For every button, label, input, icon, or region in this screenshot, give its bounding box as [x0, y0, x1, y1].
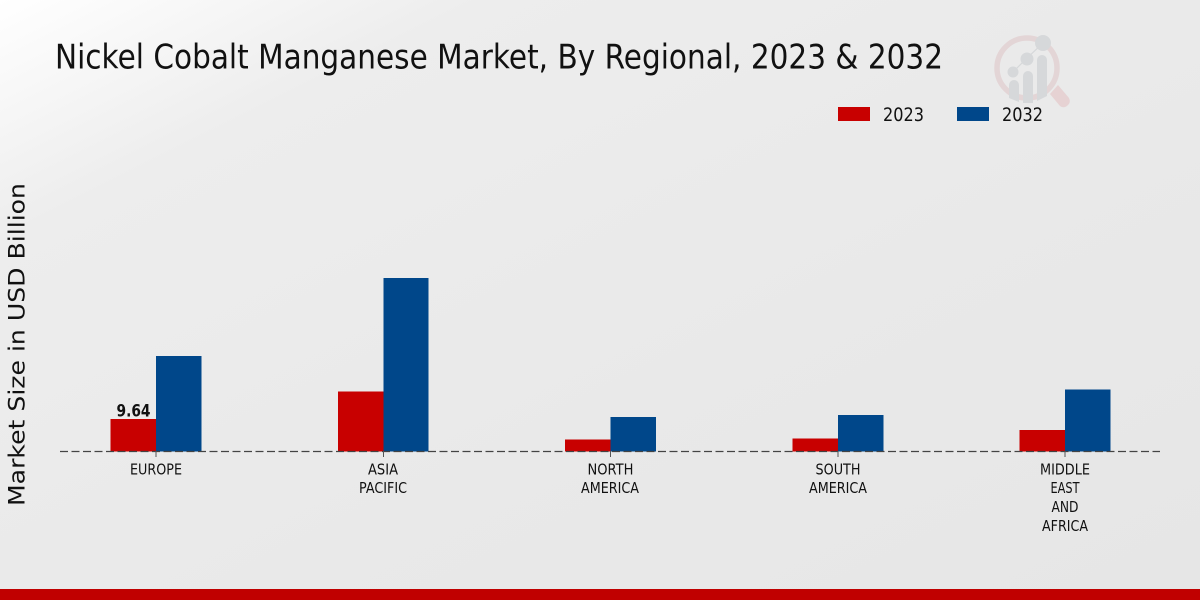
group: North America	[565, 417, 656, 452]
watermark logo icon	[997, 35, 1070, 107]
label: North America: NORTH	[588, 460, 634, 478]
group: Europe	[110, 356, 202, 452]
label: Middle East and Africa	[1040, 460, 1090, 535]
title: Nickel Cobalt Manganese Market, By Regional, 2023 & 2032	[55, 38, 943, 78]
bottom bar	[0, 589, 1200, 600]
label: Middle East and Africa: AND	[1052, 498, 1078, 516]
label: Middle East and Africa: MIDDLE	[1040, 460, 1090, 478]
x axis baseline	[60, 451, 1160, 457]
label: Middle East and Africa: EAST	[1050, 479, 1080, 497]
group: Middle East and Africa	[1020, 390, 1110, 452]
y axis label: Market Size in USD Billion	[4, 183, 30, 506]
label: South America: AMERICA	[809, 479, 868, 497]
label: Asia Pacific	[359, 460, 407, 497]
x axis labels	[130, 460, 1090, 535]
label: South America	[809, 460, 868, 497]
label: North America	[581, 460, 640, 497]
label: Asia Pacific: PACIFIC	[359, 479, 407, 497]
label: Asia Pacific: ASIA	[368, 460, 399, 478]
legend	[838, 104, 1043, 126]
legend: 2032	[957, 104, 1043, 126]
legend: 2023: 2023	[883, 104, 924, 126]
label: Middle East and Africa: AFRICA	[1042, 517, 1089, 535]
label: South America: SOUTH	[816, 460, 860, 478]
group: Asia Pacific	[338, 278, 428, 452]
label: Europe: EUROPE	[130, 460, 182, 478]
bar chart	[110, 278, 1110, 452]
group: South America	[792, 415, 884, 452]
group: Europe: 9.64	[116, 402, 151, 422]
legend: 2032: 2032	[1002, 104, 1043, 126]
legend: 2023	[838, 104, 924, 126]
label: North America: AMERICA	[581, 479, 640, 497]
